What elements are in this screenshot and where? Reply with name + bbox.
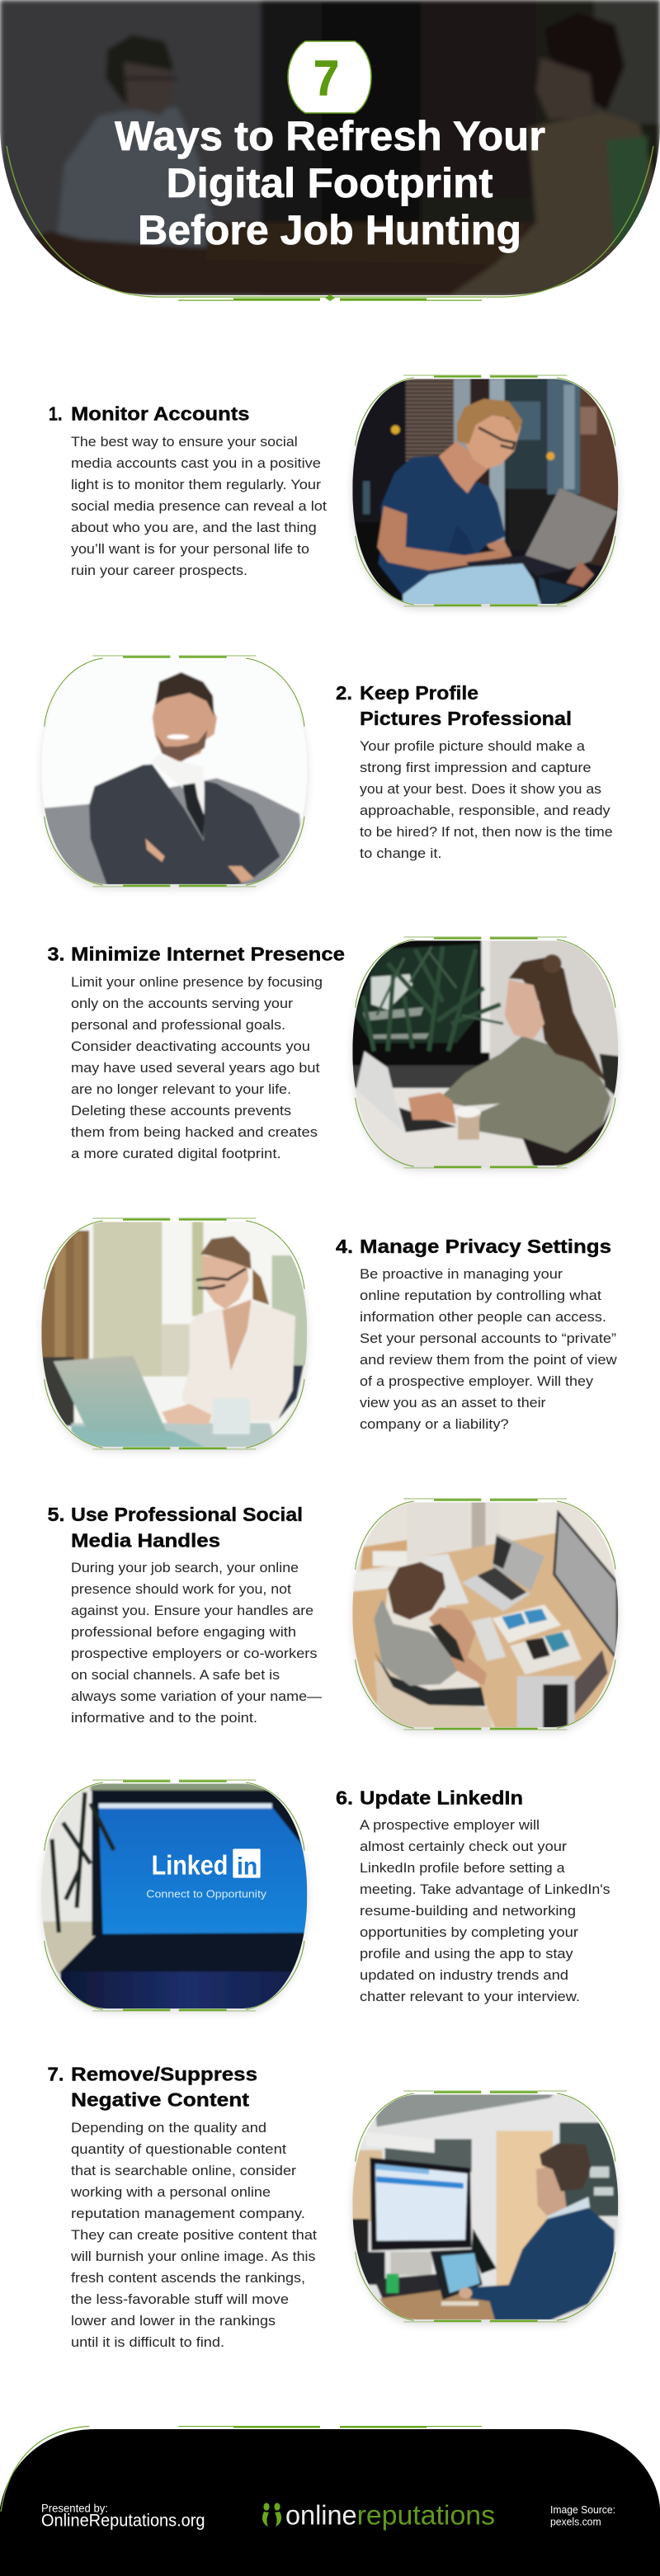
body text: opportunities by completing your (360, 1925, 579, 1940)
step 6 text (336, 1787, 610, 2004)
body text: profile and using the app to stay (360, 1947, 574, 1961)
photo 7: man at monitor in office (346, 2087, 624, 2326)
body text: personal and professional goals. (71, 1018, 285, 1033)
presented by: Presented by: (41, 2503, 108, 2514)
heading: 6. (336, 1787, 353, 1808)
body text: resume-building and networking (360, 1904, 576, 1919)
photo 2: man in suit (35, 652, 313, 891)
body text (360, 1818, 610, 2004)
body text: media accounts cast you in a positive (71, 456, 321, 471)
logo wordmark: online (285, 2499, 357, 2531)
body text: the less-favorable stuff will move (71, 2292, 289, 2307)
body text: light is to monitor them regularly. Your (71, 478, 322, 492)
body text: that is searchable online, consider (71, 2164, 297, 2178)
footer curved outline (1, 2427, 89, 2512)
body text: until it is difficult to find. (71, 2335, 224, 2350)
step 1 text (49, 403, 327, 578)
step 2 text (336, 682, 613, 861)
body text: view you as an asset to their (360, 1396, 546, 1410)
body text: them from being hacked and creates (71, 1125, 318, 1140)
body text: approachable, responsible, and ready (360, 803, 610, 818)
body text: Depending on the quality and (71, 2121, 266, 2136)
body text: informative and to the point. (71, 1711, 257, 1726)
heading: Monitor Accounts (71, 403, 249, 424)
body text: Limit your online presence by focusing (71, 975, 323, 990)
body text: to change it. (360, 846, 442, 861)
body text: against you. Ensure your handles are (71, 1604, 314, 1618)
body text: Be proactive in managing your (360, 1267, 563, 1282)
image source (550, 2504, 615, 2527)
title: Before Job Hunting (138, 207, 521, 253)
header ornament lines (178, 294, 482, 301)
body text: Deleting these accounts prevents (71, 1104, 291, 1118)
body text: you at your best. Does it show you as (360, 782, 601, 797)
photo 6: LinkedIn on a laptop (35, 1776, 313, 2015)
body text: quantity of questionable content (71, 2142, 286, 2157)
LinkedIn logo: Connect to Opportunity (146, 1888, 266, 1900)
body text: working with a personal online (70, 2185, 271, 2200)
body text: professional before engaging with (71, 1625, 296, 1640)
heading: 7. (48, 2064, 64, 2085)
body text (71, 435, 327, 578)
photo 4: woman with glasses at laptop (35, 1214, 313, 1453)
step 5 text (48, 1504, 323, 1726)
image source: Image Source: (550, 2504, 615, 2516)
heading: 5. (48, 1504, 64, 1525)
heading: 2. (336, 682, 352, 704)
heading: Negative Content (71, 2089, 249, 2110)
body text (360, 1267, 617, 1432)
image source: pexels.com (550, 2516, 601, 2527)
body text: ruin your career prospects. (71, 563, 248, 578)
footer ornament lines (178, 2426, 482, 2428)
body text: reputation management company. (71, 2206, 305, 2221)
step 3 text (48, 944, 345, 1161)
logo wordmark (285, 2499, 495, 2531)
heading: Use Professional Social (71, 1504, 303, 1525)
LinkedIn logo: in (237, 1853, 257, 1880)
header curved outline (7, 146, 653, 297)
body text: on social channels. A safe bet is (71, 1668, 280, 1683)
body text: a more curated digital footprint. (71, 1147, 281, 1161)
body text: always some variation of your name— (71, 1689, 323, 1704)
body text: meeting. Take advantage of LinkedIn's (360, 1882, 610, 1897)
title: Digital Footprint (167, 160, 493, 206)
body text: LinkedIn profile before setting a (360, 1861, 565, 1876)
body text: Set your personal accounts to “private” (360, 1331, 616, 1346)
body text: chatter relevant to your interview. (360, 1990, 580, 2004)
body text: about who you are, and the last thing (71, 520, 317, 535)
body text: may have used several years ago but (71, 1061, 320, 1076)
body text: Consider deactivating accounts you (71, 1039, 310, 1054)
body text: to be hired? If not, then now is the time (360, 825, 613, 840)
footer (0, 2426, 660, 2576)
header banner (0, 0, 660, 301)
body text: almost certainly check out your (360, 1839, 568, 1854)
number badge (288, 41, 371, 113)
title: Ways to Refresh Your (115, 113, 545, 159)
presented by: OnlineReputations.org (41, 2511, 205, 2531)
body text: fresh content ascends the rankings, (71, 2271, 305, 2286)
body text: They can create positive content that (71, 2228, 317, 2243)
body text: of a prospective employer. Will they (360, 1374, 594, 1389)
body text: only on the accounts serving your (71, 996, 294, 1011)
presented by (41, 2503, 205, 2531)
heading (48, 2064, 257, 2110)
body text (71, 1561, 323, 1726)
body text: and review them from the point of view (360, 1353, 617, 1368)
logo wordmark: reputations (357, 2499, 495, 2531)
heading: Pictures Professional (360, 708, 572, 729)
heading: Keep Profile (360, 682, 478, 704)
photo 1: man with laptop (346, 371, 624, 610)
body text: will burnish your online image. As this (70, 2249, 315, 2264)
body text: presence should work for you, not (71, 1582, 291, 1597)
number badge: 7 (314, 50, 339, 106)
LinkedIn logo (146, 1848, 266, 1900)
body text (360, 739, 613, 861)
body text: strong first impression and capture (360, 761, 592, 775)
footer panel (0, 2429, 660, 2576)
body text: A prospective employer will (360, 1818, 540, 1833)
step 4 text (336, 1236, 617, 1432)
heading: 3. (48, 944, 64, 965)
body text: you’ll want is for your personal life to (71, 542, 309, 557)
LinkedIn logo: Linked (152, 1850, 228, 1881)
title (115, 113, 545, 253)
heading: 1. (49, 403, 63, 424)
body text: social media presence can reveal a lot (71, 499, 327, 514)
heading: Manage Privacy Settings (360, 1236, 611, 1257)
heading (336, 682, 572, 729)
body text: updated on industry trends and (360, 1968, 568, 1983)
heading (48, 1504, 303, 1551)
heading: 4. (336, 1236, 353, 1257)
heading: Update LinkedIn (360, 1787, 523, 1808)
heading: Remove/Suppress (71, 2064, 257, 2085)
body text: The best way to ensure your social (71, 435, 298, 450)
body text (70, 2121, 317, 2350)
body text: lower and lower in the rankings (71, 2314, 276, 2329)
logo icon (262, 2503, 281, 2527)
body text: online reputation by controlling what (360, 1288, 601, 1303)
body text (71, 975, 323, 1161)
body text: prospective employers or co-workers (71, 1646, 317, 1661)
header photo: two men at a table (0, 0, 660, 297)
photo 5: man at desk from above (346, 1495, 624, 1734)
photo 3: woman at laptop with plants (346, 933, 624, 1172)
heading: Minimize Internet Presence (71, 944, 345, 965)
body text: are no longer relevant to your life. (71, 1082, 291, 1097)
body text: company or a liability? (360, 1417, 509, 1432)
body text: information other people can access. (360, 1310, 606, 1325)
heading: Media Handles (71, 1529, 220, 1551)
step 7 text (48, 2064, 317, 2350)
body text: Your profile picture should make a (360, 739, 586, 754)
body text: During your job search, your online (71, 1561, 299, 1575)
